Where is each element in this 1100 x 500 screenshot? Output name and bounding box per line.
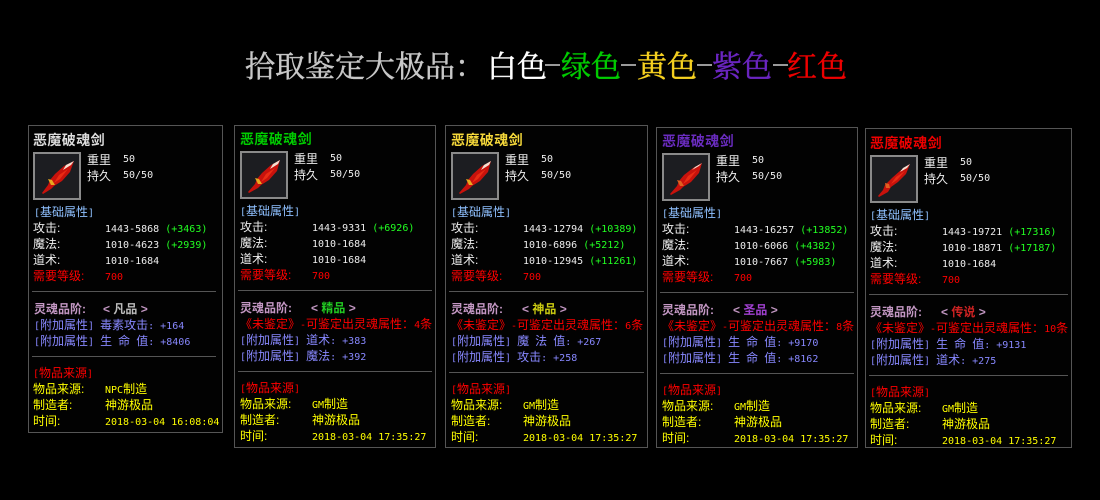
base attributes: 需要等级: (451, 269, 502, 283)
base attributes (33, 205, 207, 283)
title (245, 51, 847, 84)
item source: 神游极品 (105, 398, 153, 412)
weight and durability: 持久 (924, 172, 948, 186)
base attributes (662, 206, 848, 284)
weight and durability: 重里 (87, 153, 111, 167)
item name: 恶魔破魂剑 (870, 135, 942, 151)
item source: 物品来源: (451, 398, 502, 412)
base attributes: 1010-7667 (+5983) (734, 257, 836, 268)
soul grade and extra attributes: 灵魂品阶: (662, 303, 714, 317)
weight and durability: 重里 (505, 153, 529, 167)
panel: red item (865, 128, 1072, 448)
item source: 神游极品 (734, 415, 782, 429)
item source: GM制造 (312, 397, 348, 411)
base attributes: [基础属性] (870, 208, 930, 222)
soul grade and extra attributes: [附加属性] 魔法: +392 (240, 349, 366, 363)
panel: purple item (656, 127, 858, 448)
item source: [物品来源] (451, 382, 511, 396)
soul grade and extra attributes: < 圣品 > (733, 303, 778, 317)
base attributes: 魔法: (33, 237, 60, 251)
soul grade and extra attributes: [附加属性] 生 命 值: +9170 (662, 335, 818, 349)
weight and durability: 50 (123, 154, 135, 165)
base attributes: 700 (312, 271, 330, 282)
weight and durability: 重里 (924, 156, 948, 170)
item source: NPC制造 (105, 382, 147, 396)
weight and durability: 50/50 (752, 171, 782, 182)
panel: white item (28, 125, 223, 433)
item source: 时间: (870, 433, 897, 447)
weight and durability: 持久 (294, 168, 318, 182)
item source: 制造者: (33, 398, 72, 412)
soul grade and extra attributes: < 神品 > (522, 302, 567, 316)
icon: sword (662, 153, 710, 201)
item source: 时间: (451, 430, 478, 444)
soul grade and extra attributes (451, 302, 643, 364)
icon: sword (240, 151, 288, 199)
weight and durability: 持久 (505, 169, 529, 183)
item source: [物品来源] (870, 385, 930, 399)
item source: 物品来源: (33, 382, 84, 396)
base attributes: 需要等级: (662, 270, 713, 284)
base attributes (240, 204, 414, 282)
soul grade and extra attributes: [附加属性] 魔 法 值: +267 (451, 334, 601, 348)
item source: 制造者: (662, 415, 701, 429)
soul grade and extra attributes: [附加属性] 毒素攻击: +164 (34, 318, 184, 332)
weight and durability: 50/50 (330, 169, 360, 180)
base attributes: 700 (942, 275, 960, 286)
item source: 神游极品 (942, 417, 990, 431)
weight and durability: 持久 (716, 170, 740, 184)
title: 紫色 (712, 51, 772, 84)
item source: 物品来源: (662, 399, 713, 413)
weight and durability: 50 (752, 155, 764, 166)
item source: 2018-03-04 17:35:27 (312, 432, 426, 443)
soul grade and extra attributes: 灵魂品阶: (34, 302, 86, 316)
item source: 时间: (662, 431, 689, 445)
soul grade and extra attributes: 灵魂品阶: (870, 305, 922, 319)
base attributes: 道术: (451, 253, 478, 267)
base attributes: [基础属性] (662, 206, 722, 220)
item source: 时间: (240, 429, 267, 443)
item source: 神游极品 (312, 413, 360, 427)
soul grade and extra attributes (240, 301, 432, 363)
base attributes: 攻击: (33, 221, 60, 235)
base attributes: [基础属性] (451, 205, 511, 219)
item source: 物品来源: (240, 397, 291, 411)
base attributes: 700 (105, 272, 123, 283)
base attributes: 1010-1684 (942, 259, 996, 270)
title: 红色 (787, 51, 847, 84)
base attributes: 道术: (240, 252, 267, 266)
weight and durability: 50 (541, 154, 553, 165)
soul grade and extra attributes: < 传说 > (941, 305, 986, 319)
base attributes: 攻击: (662, 222, 689, 236)
base attributes: 魔法: (870, 240, 897, 254)
soul grade and extra attributes: [附加属性] 生 命 值: +8162 (662, 351, 818, 365)
item source: [物品来源] (240, 381, 300, 395)
panel: green item (234, 125, 436, 448)
item name: 恶魔破魂剑 (240, 131, 312, 147)
base attributes (451, 205, 637, 283)
soul grade and extra attributes: [附加属性] 生 命 值: +9131 (870, 337, 1026, 351)
soul grade and extra attributes: [附加属性] 道术: +383 (240, 333, 366, 347)
soul grade and extra attributes: 《未鉴定》-可鉴定出灵魂属性：8条 (662, 319, 854, 333)
item source (870, 385, 1056, 447)
base attributes (870, 208, 1056, 286)
base attributes: 1010-6896 (+5212) (523, 240, 625, 251)
base attributes: [基础属性] (34, 205, 94, 219)
item source: 2018-03-04 17:35:27 (523, 433, 637, 444)
base attributes: 攻击: (870, 224, 897, 238)
weight and durability (294, 152, 360, 182)
weight and durability: 50/50 (960, 173, 990, 184)
soul grade and extra attributes: < 凡品 > (103, 302, 148, 316)
base attributes: 需要等级: (870, 272, 921, 286)
base attributes: 攻击: (451, 221, 478, 235)
item source: 2018-03-04 16:08:04 (105, 417, 219, 428)
item source: GM制造 (942, 401, 978, 415)
soul grade and extra attributes (34, 302, 190, 348)
item source: 时间: (33, 414, 60, 428)
title: 白色 (487, 51, 547, 84)
base attributes: 1443-12794 (+10389) (523, 224, 637, 235)
item name: 恶魔破魂剑 (662, 133, 734, 149)
item source (240, 381, 426, 443)
base attributes: 1443-5868 (+3463) (105, 224, 207, 235)
base attributes: 1443-19721 (+17316) (942, 227, 1056, 238)
soul grade and extra attributes: < 精品 > (311, 301, 356, 315)
base attributes: 1443-16257 (+13852) (734, 225, 848, 236)
base attributes: 需要等级: (33, 269, 84, 283)
item source: 制造者: (240, 413, 279, 427)
base attributes: 700 (523, 272, 541, 283)
title: 绿色 (561, 51, 621, 84)
soul grade and extra attributes (662, 303, 854, 365)
item source: GM制造 (523, 398, 559, 412)
soul grade and extra attributes: [附加属性] 道术: +275 (870, 353, 996, 367)
base attributes: 1010-1684 (312, 239, 366, 250)
base attributes: 1443-9331 (+6926) (312, 223, 414, 234)
soul grade and extra attributes: 《未鉴定》-可鉴定出灵魂属性：10条 (870, 321, 1068, 335)
item source: 制造者: (451, 414, 490, 428)
soul grade and extra attributes: 《未鉴定》-可鉴定出灵魂属性：4条 (240, 317, 432, 331)
base attributes: 700 (734, 273, 752, 284)
weight and durability: 50/50 (541, 170, 571, 181)
item name: 恶魔破魂剑 (451, 132, 523, 148)
base attributes: 道术: (870, 256, 897, 270)
weight and durability (716, 154, 782, 184)
title: 拾取鉴定大极品： (245, 51, 485, 84)
weight and durability (87, 153, 153, 183)
item source: [物品来源] (33, 366, 93, 380)
item source (662, 383, 848, 445)
item source: 2018-03-04 17:35:27 (734, 434, 848, 445)
icon: sword (870, 155, 918, 203)
base attributes: 1010-18871 (+17187) (942, 243, 1056, 254)
base attributes: 魔法: (240, 236, 267, 250)
weight and durability (924, 156, 990, 186)
base attributes: 道术: (33, 253, 60, 267)
item source: [物品来源] (662, 383, 722, 397)
item source: 物品来源: (870, 401, 921, 415)
soul grade and extra attributes: 灵魂品阶: (451, 302, 503, 316)
item name: 恶魔破魂剑 (33, 132, 105, 148)
item source: 2018-03-04 17:35:27 (942, 436, 1056, 447)
soul grade and extra attributes (870, 305, 1068, 367)
weight and durability: 50/50 (123, 170, 153, 181)
panel: yellow item (445, 125, 648, 448)
base attributes: [基础属性] (240, 204, 300, 218)
base attributes: 1010-12945 (+11261) (523, 256, 637, 267)
item source: GM制造 (734, 399, 770, 413)
item source: 制造者: (870, 417, 909, 431)
icon: sword (33, 152, 81, 200)
title: 黄色 (637, 51, 697, 84)
item source (33, 366, 219, 428)
soul grade and extra attributes: [附加属性] 生 命 值: +8406 (34, 334, 190, 348)
base attributes: 1010-1684 (312, 255, 366, 266)
soul grade and extra attributes: 灵魂品阶: (240, 301, 292, 315)
weight and durability (505, 153, 571, 183)
base attributes: 魔法: (451, 237, 478, 251)
weight and durability: 50 (960, 157, 972, 168)
item source: 神游极品 (523, 414, 571, 428)
soul grade and extra attributes: 《未鉴定》-可鉴定出灵魂属性：6条 (451, 318, 643, 332)
base attributes: 1010-1684 (105, 256, 159, 267)
soul grade and extra attributes: [附加属性] 攻击: +258 (451, 350, 577, 364)
base attributes: 需要等级: (240, 268, 291, 282)
icon: sword (451, 152, 499, 200)
base attributes: 道术: (662, 254, 689, 268)
item source (451, 382, 637, 444)
base attributes: 攻击: (240, 220, 267, 234)
base attributes: 魔法: (662, 238, 689, 252)
base attributes: 1010-6066 (+4382) (734, 241, 836, 252)
weight and durability: 50 (330, 153, 342, 164)
weight and durability: 持久 (87, 169, 111, 183)
base attributes: 1010-4623 (+2939) (105, 240, 207, 251)
weight and durability: 重里 (294, 152, 318, 166)
weight and durability: 重里 (716, 154, 740, 168)
